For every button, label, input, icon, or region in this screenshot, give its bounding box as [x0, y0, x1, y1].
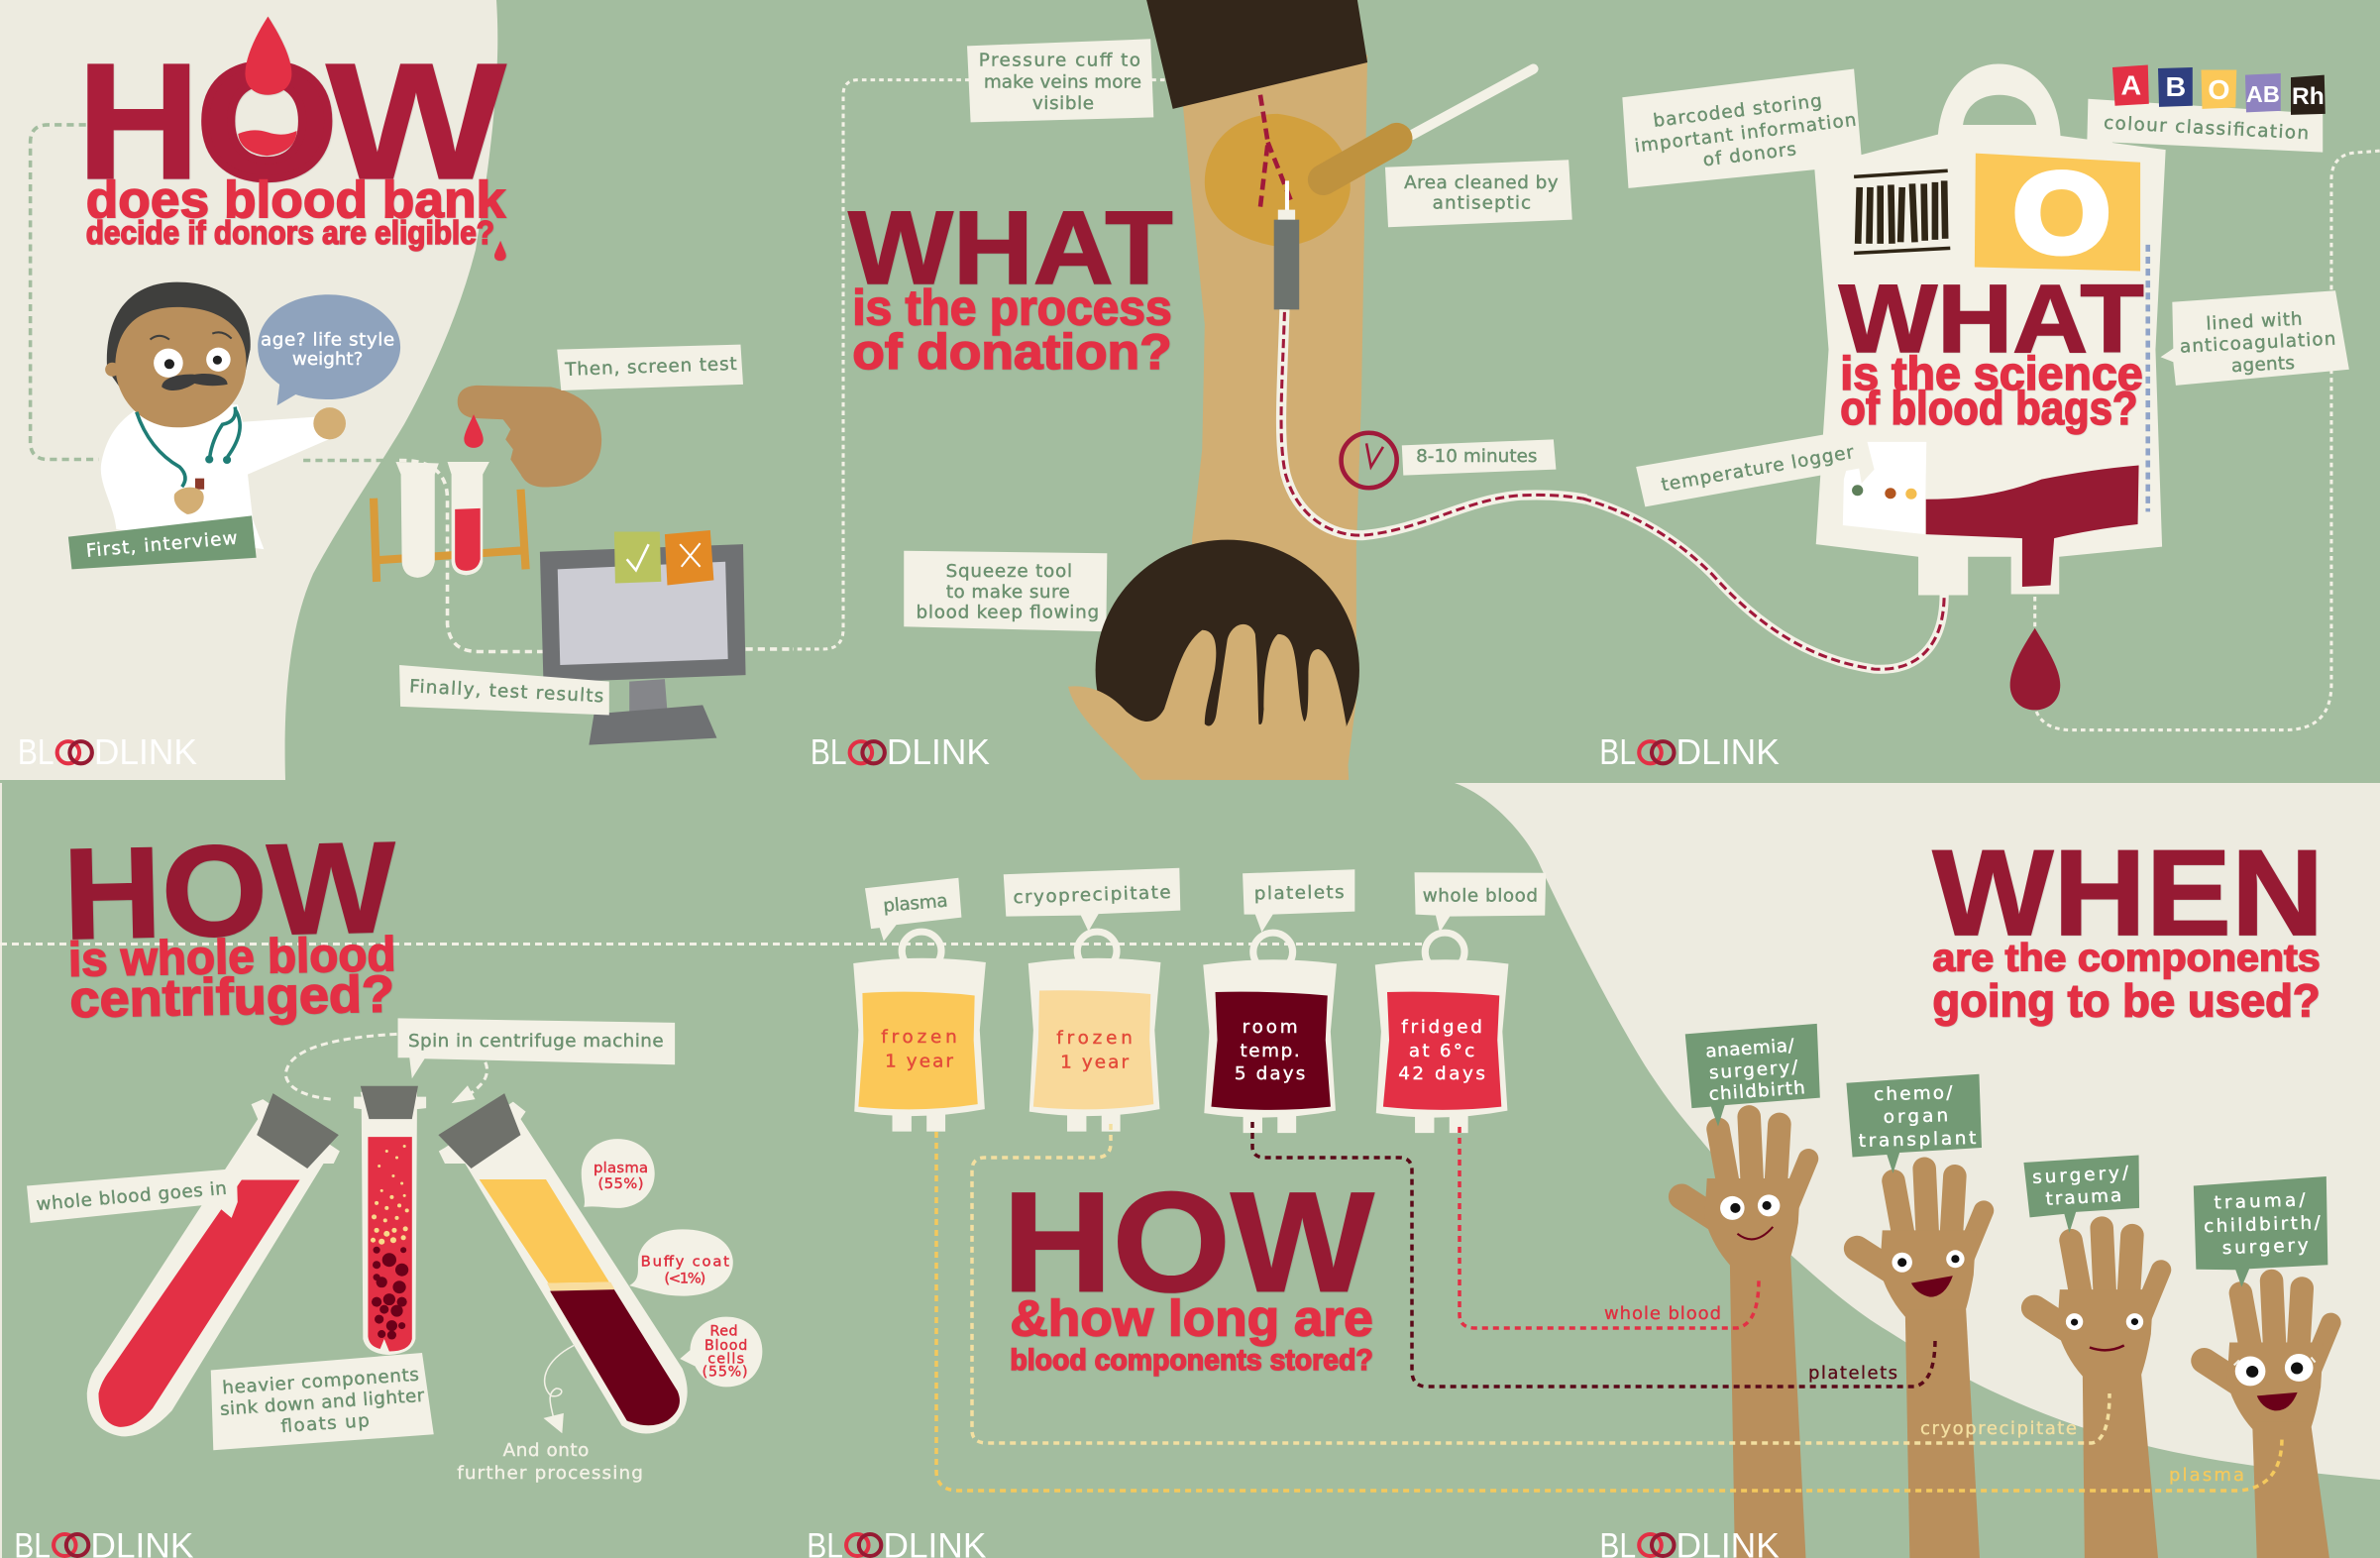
- bubble: red blood cells: cells: [707, 1352, 744, 1367]
- label: pressure cuff: [967, 39, 1153, 122]
- title: WHAT: WHAT: [1839, 265, 2144, 373]
- label: then, screen test: [557, 345, 743, 390]
- bag: whole blood: [1375, 933, 1508, 1133]
- blood pressure cuff: [1146, 0, 1367, 109]
- logo: [807, 1526, 987, 1558]
- label: area cleaned: antiseptic: [1433, 193, 1531, 214]
- bag: plasma: frozen: [881, 1027, 957, 1048]
- logo: BL: [18, 731, 54, 772]
- label: plasma: plasma: [882, 891, 948, 917]
- label: pressure cuff: make veins more: [984, 72, 1141, 93]
- title: HOW: centrifuged?: [69, 965, 394, 1029]
- label: trauma childbirth surgery: childbirth/: [2204, 1213, 2322, 1237]
- label: whole blood goes in: whole blood goes in: [36, 1178, 228, 1215]
- logo: DLINK: [94, 731, 197, 772]
- label: first, interview: [68, 515, 257, 569]
- bubble: red blood cells: (55%): [703, 1365, 748, 1380]
- cream area: bottom right: [1455, 783, 2380, 1480]
- title: WHAT: is the science: [1840, 348, 2143, 400]
- title: WHEN: going to be used?: [1932, 975, 2321, 1026]
- hand 2: [1857, 1168, 1984, 1558]
- title: WHAT: WHAT: [848, 191, 1173, 306]
- icon: check: [614, 532, 661, 583]
- bubble: plasma: (55%): [598, 1175, 643, 1192]
- logo: DLINK: [1677, 731, 1780, 772]
- right test tube: [438, 1093, 688, 1433]
- logo: BL: [1599, 731, 1636, 772]
- label: anticoagulation: [2161, 290, 2349, 386]
- spin arrows: [285, 1034, 487, 1103]
- pointing hand with blood drop: [458, 386, 601, 488]
- label: trauma childbirth surgery: trauma/: [2214, 1190, 2307, 1213]
- tile: O: [2201, 70, 2236, 109]
- dashed line across bottom row: [0, 943, 1427, 946]
- logo: [18, 731, 197, 772]
- title: WHAT: of donation?: [852, 323, 1172, 380]
- panel: process of donation: [793, 0, 1586, 801]
- computer monitor: [540, 530, 746, 745]
- tile: A: [2112, 64, 2149, 106]
- tile: AB: [2245, 73, 2281, 112]
- label: anaemia surgery childbirth: anaemia/: [1705, 1036, 1795, 1062]
- label: trauma childbirth surgery: surgery: [2221, 1235, 2309, 1259]
- text: further processing: And onto: [503, 1440, 589, 1461]
- hand 1: [1681, 1117, 1808, 1558]
- dashed flow line: [31, 125, 793, 651]
- label: surgery trauma: [2023, 1156, 2139, 1233]
- label: anticoagulation: lined with: [2206, 309, 2303, 335]
- dotted flow line: [793, 80, 1167, 649]
- line labels: plasma: [2169, 1465, 2244, 1486]
- title: WHAT: of blood bags?: [1840, 384, 2138, 435]
- label: trauma childbirth surgery: [2194, 1176, 2327, 1287]
- text: further processing: [457, 1440, 643, 1484]
- title: WHEN: [1932, 826, 2324, 1026]
- label: heavier components: heavier components: [222, 1365, 420, 1398]
- label: 8-10 minutes: 8-10 minutes: [1416, 446, 1538, 467]
- label: heavier components: floats up: [280, 1410, 370, 1437]
- drop and blood in the O: [238, 17, 296, 156]
- squeeze ball: [1096, 539, 1359, 727]
- label: finally, test results: [399, 665, 609, 715]
- tile: Rh: [2291, 75, 2326, 115]
- label: chemo organ transplant: [1846, 1074, 1982, 1173]
- label: 8-10 minutes: [1402, 439, 1556, 476]
- title: WHEN: WHEN: [1932, 826, 2324, 961]
- bubble: plasma: plasma: [594, 1160, 648, 1176]
- swab: [1324, 69, 1533, 179]
- blood type tiles: [2112, 64, 2326, 115]
- panel: when components are used: [1599, 826, 2330, 1558]
- panel: storage of components: [807, 868, 1546, 1558]
- logo: DLINK: [887, 731, 990, 772]
- line labels: cryoprecipitate: [1920, 1418, 2077, 1439]
- bubble: buffy coat: Buffy coat: [641, 1254, 729, 1271]
- icon: cross: [665, 530, 713, 585]
- label: finally, test results: Finally, test results: [409, 676, 604, 707]
- bubble: red blood cells: [680, 1317, 762, 1387]
- title: HOW: O: [198, 31, 336, 212]
- bag: platelets: temp.: [1241, 1041, 1300, 1061]
- edge strip: [0, 783, 2, 1558]
- logo: [1599, 1526, 1780, 1558]
- label: anaemia surgery childbirth: [1685, 1024, 1820, 1127]
- label: cryoprecipitate: cryoprecipitate: [1013, 882, 1171, 908]
- label: colour classification: colour classification: [2104, 113, 2310, 144]
- temperature logger: [1843, 442, 1926, 534]
- doctor character: [101, 282, 346, 549]
- bag: whole blood: fridged: [1401, 1017, 1482, 1038]
- test tube rack: [374, 462, 526, 582]
- speech bubble: doctor questions: age? life style: [261, 330, 394, 351]
- label: anaemia surgery childbirth: surgery/: [1708, 1057, 1799, 1083]
- label: anaemia surgery childbirth: childbirth: [1708, 1078, 1805, 1105]
- blood bag: [1814, 63, 2166, 596]
- tile: B: [2158, 67, 2193, 107]
- title: HOW: HOW: [1003, 1162, 1374, 1321]
- line labels: [1604, 1303, 2244, 1486]
- label: whole blood goes in: [27, 1168, 238, 1223]
- label: cryoprecipitate: [1004, 868, 1180, 932]
- clock: [1342, 433, 1397, 488]
- label: chemo organ transplant: transplant: [1858, 1128, 1977, 1152]
- label: colour classification: [2087, 99, 2323, 160]
- label: chemo organ transplant: chemo/: [1874, 1082, 1954, 1105]
- logo: BL: [811, 731, 847, 772]
- arm: [1182, 55, 1367, 780]
- label: temperature logger: temperature logger: [1660, 442, 1856, 496]
- title: WHAT: is the process: [852, 279, 1172, 335]
- particles: red cells: [372, 1247, 408, 1340]
- label: spin: Spin in centrifuge machine: [408, 1031, 664, 1052]
- tile: A: A: [2121, 70, 2141, 102]
- label: spin: [398, 1018, 675, 1078]
- anticoagulant lining: [2143, 245, 2152, 511]
- title: HOW: blood components stored?: [1010, 1344, 1373, 1377]
- title: HOW: H: [77, 29, 200, 214]
- logo: [14, 1526, 194, 1558]
- label: anticoagulation: agents: [2230, 353, 2295, 377]
- left test tube: [87, 1093, 340, 1436]
- blood type card: O: O: [2013, 152, 2110, 277]
- bag: platelets: [1203, 933, 1337, 1133]
- bag: plasma: 1 year: [885, 1052, 954, 1072]
- blood drop: [2010, 597, 2060, 710]
- label: barcode: [1622, 69, 1862, 188]
- label: barcode: barcoded storing: [1652, 91, 1823, 132]
- hand 3: [2034, 1228, 2161, 1558]
- title: HOW: does blood bank: [86, 171, 506, 229]
- line labels: platelets: [1808, 1363, 1897, 1384]
- panel: science of blood bags: [1582, 63, 2380, 772]
- bubble: red blood cells: Red: [710, 1324, 738, 1340]
- needle: [1274, 180, 1299, 309]
- label: whole blood: whole blood: [1423, 886, 1538, 907]
- label: squeeze tool: [904, 551, 1107, 631]
- label: pressure cuff: Pressure cuff to: [979, 51, 1140, 70]
- component lines to hands: [936, 1122, 2282, 1491]
- blood type card: O: [1975, 152, 2140, 277]
- bubble: buffy coat: [629, 1229, 733, 1296]
- dotted flow line: [2036, 151, 2380, 730]
- label: pressure cuff: visible: [1032, 93, 1094, 114]
- hand 4: [2205, 1280, 2330, 1558]
- title: HOW: [77, 17, 506, 261]
- blood tube: [1582, 499, 1944, 669]
- bag: plasma: [853, 932, 986, 1132]
- label: barcode: of donors: [1702, 139, 1797, 170]
- label: whole blood: [1415, 872, 1546, 933]
- label: platelets: [1243, 869, 1354, 933]
- bubble: red blood cells: Blood: [704, 1338, 747, 1354]
- bag: platelets: room: [1243, 1017, 1298, 1038]
- label: plasma: [865, 878, 961, 942]
- logo: [1599, 731, 1780, 772]
- label: heavier components: sink down and lighter: [219, 1386, 425, 1420]
- label: area cleaned: [1385, 160, 1572, 227]
- middle test tube: [354, 1086, 426, 1355]
- antiseptic patch: [1205, 114, 1351, 246]
- label: anticoagulation: anticoagulation: [2179, 329, 2336, 358]
- bag: whole blood: 42 days: [1398, 1063, 1485, 1084]
- tile: B: B: [2166, 71, 2186, 103]
- title: HOW: W: [326, 29, 506, 214]
- veins: [1260, 95, 1291, 207]
- label: area cleaned: Area cleaned by: [1404, 172, 1559, 193]
- label: chemo organ transplant: organ: [1883, 1105, 1948, 1128]
- arrow: further processing: [543, 1346, 574, 1433]
- title: HOW: is whole blood: [67, 928, 396, 987]
- cream area: top left: [0, 0, 497, 780]
- label: temperature logger: [1636, 429, 1875, 506]
- label: surgery trauma: trauma: [2045, 1185, 2122, 1210]
- bag: cryoprecipitate: frozen: [1056, 1028, 1133, 1049]
- speech bubble: doctor questions: weight?: [292, 349, 363, 370]
- label: first, interview: First, interview: [85, 528, 239, 562]
- hand gripping ball: [1068, 624, 1349, 780]
- label: platelets: platelets: [1254, 882, 1345, 904]
- title: HOW: HOW: [61, 815, 397, 967]
- label: squeeze tool: to make sure: [946, 582, 1070, 603]
- title: WHEN: are the components: [1932, 937, 2321, 979]
- label: squeeze tool: blood keep flowing: [916, 603, 1099, 623]
- panel: centrifuge: [14, 815, 762, 1558]
- barcode: [1854, 170, 1950, 253]
- title: WHAT: [848, 191, 1173, 380]
- bag: cryoprecipitate: [1028, 932, 1160, 1132]
- bubble: buffy coat: (<1%): [664, 1271, 705, 1287]
- label: barcode: important information: [1634, 110, 1858, 157]
- label: then, screen test: Then, screen test: [564, 354, 737, 381]
- particles: plasma and platelets: [371, 1145, 409, 1245]
- tile: O: O: [2208, 74, 2230, 106]
- title: WHAT: [1839, 265, 2144, 435]
- blood tube: [1281, 309, 1586, 535]
- bag: cryoprecipitate: 1 year: [1060, 1053, 1130, 1073]
- title: HOW: [61, 815, 397, 1029]
- text: further processing: further processing: [457, 1463, 643, 1484]
- bag: platelets: 5 days: [1235, 1063, 1305, 1084]
- label: surgery trauma: surgery/: [2032, 1163, 2130, 1188]
- speech bubble: doctor questions: [258, 294, 400, 405]
- line labels: whole blood: [1604, 1303, 1721, 1324]
- title: HOW: &how long are: [1010, 1289, 1373, 1346]
- tile: AB: AB: [2246, 81, 2280, 107]
- panel: how donors are screened: [18, 17, 793, 772]
- label: heavier components: [211, 1353, 434, 1450]
- logo: [811, 731, 990, 772]
- title: HOW: decide if donors are eligible?: [86, 215, 494, 252]
- bag: whole blood: at 6°c: [1409, 1041, 1474, 1061]
- label: squeeze tool: Squeeze tool: [946, 561, 1072, 582]
- bubble: plasma: [582, 1139, 655, 1208]
- tile: Rh: Rh: [2292, 83, 2325, 110]
- blood in bag: [1926, 466, 2139, 587]
